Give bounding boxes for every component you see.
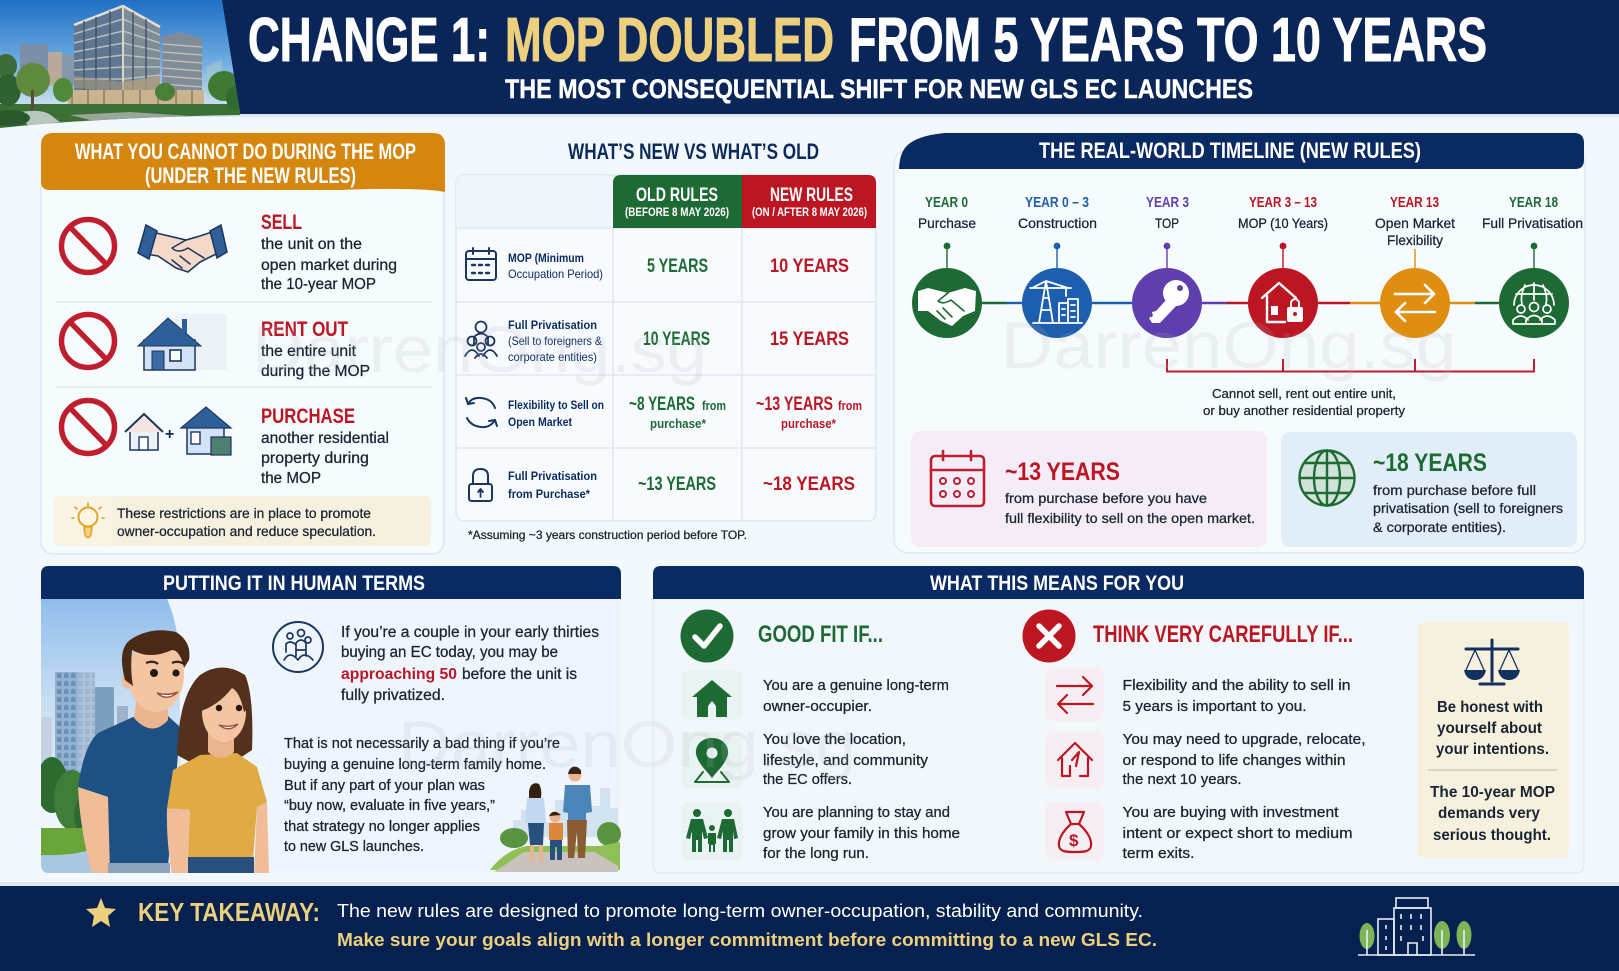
column header: old rules: (BEFORE 8 MAY 2026) xyxy=(625,205,729,219)
row: full privatisation: (Sell to foreigners & xyxy=(508,334,602,348)
step: year 18 privatisation xyxy=(1482,194,1583,338)
main title xyxy=(248,6,1487,75)
row: flexibility to sell xyxy=(466,394,862,431)
item: location: the EC offers. xyxy=(763,772,852,788)
step: year 3-13 MOP: YEAR 3 – 13 xyxy=(1249,194,1317,211)
text block: couple in thirties: buying an EC today, you may be xyxy=(341,644,558,661)
watermarks: DarrenOng.sg xyxy=(1001,308,1456,382)
item: upgrade or relocate: or respond to life changes within xyxy=(1122,753,1346,769)
row: privatisation from purchase: Full Privatisation xyxy=(508,469,597,483)
item: family xyxy=(681,802,960,862)
row: flexibility to sell: Flexibility to Sell on xyxy=(508,398,604,412)
item: flexibility: Flexibility and the ability to sell in xyxy=(1122,678,1350,694)
item: location xyxy=(681,732,929,788)
row: MOP: 10 YEARS xyxy=(770,256,849,277)
column: think very carefully: THINK VERY CAREFULLY IF... xyxy=(1093,621,1353,648)
step: year 3 TOP xyxy=(1132,194,1202,338)
item: upgrade or relocate: You may need to upgrade, relocate, xyxy=(1122,732,1366,748)
heading: what this means: WHAT THIS MEANS FOR YOU xyxy=(930,572,1184,595)
heading: new vs old: WHAT’S NEW VS WHAT’S OLD xyxy=(568,139,819,164)
footer: key takeaway: The new rules are designed to promote long-term owner-occupation, stability and community. xyxy=(337,901,1143,921)
row: flexibility to sell: purchase* xyxy=(650,416,707,431)
icon: padlock xyxy=(469,469,492,501)
row: MOP xyxy=(466,248,849,281)
subtitle: THE MOST CONSEQUENTIAL SHIFT FOR NEW GLS EC LAUNCHES xyxy=(505,74,1253,104)
callout: be honest: serious thought. xyxy=(1433,827,1551,844)
column header: old rules: OLD RULES xyxy=(636,185,718,206)
icon: two houses xyxy=(125,407,231,455)
main title: CHANGE 1: xyxy=(248,6,490,75)
step: year 3-13 MOP xyxy=(1238,194,1328,338)
item: owner-occupier: owner-occupier. xyxy=(763,699,872,715)
heading: cannot do: (UNDER THE NEW RULES) xyxy=(145,163,356,188)
bracket caption: or buy another residential property xyxy=(1203,403,1405,418)
row: privatisation from purchase: ~13 YEARS xyxy=(638,474,716,495)
text block: long-term family home: “buy now, evaluate in five years,” xyxy=(284,798,495,814)
item: owner-occupier: You are a genuine long-term xyxy=(763,678,949,694)
icon: scales xyxy=(1464,640,1520,684)
row: sell: open market during xyxy=(261,257,397,274)
card: 13 years: from purchase before you have xyxy=(1005,490,1207,506)
step: year 3 TOP: TOP xyxy=(1155,215,1179,231)
heading: cannot do xyxy=(41,133,445,192)
panel: putting it in human terms xyxy=(36,566,621,875)
icon: globe xyxy=(1300,450,1355,506)
watermarks xyxy=(252,308,1456,781)
row: rent out: the entire unit xyxy=(261,343,357,360)
bracket caption xyxy=(1203,386,1405,418)
step: year 0 purchase: YEAR 0 xyxy=(925,194,968,211)
row: full privatisation: 10 YEARS xyxy=(643,329,710,350)
panel: what this means for you xyxy=(653,566,1584,873)
icon: star xyxy=(86,898,116,927)
item: upgrade or relocate xyxy=(1045,732,1366,788)
item: family: You are planning to stay and xyxy=(763,805,950,821)
step: year 3-13 MOP: MOP (10 Years) xyxy=(1238,215,1328,231)
item: location: lifestyle, and community xyxy=(763,753,929,769)
text block: long-term family home: buying a genuine long-term family home. xyxy=(284,757,546,773)
row: full privatisation: corporate entities) xyxy=(508,350,597,364)
heading: timeline: THE REAL-WORLD TIMELINE (NEW RULES) xyxy=(1039,138,1421,163)
step: year 18 privatisation: YEAR 18 xyxy=(1509,194,1558,211)
main title: MOP DOUBLED xyxy=(505,6,834,75)
comparison table xyxy=(456,175,876,521)
step: year 0 purchase: Purchase xyxy=(918,215,976,231)
callout: restrictions note: These restrictions are in place to promote xyxy=(117,505,371,521)
row: MOP: 5 YEARS xyxy=(647,256,708,277)
row: flexibility to sell: from xyxy=(702,398,726,413)
callout: be honest: Be honest with xyxy=(1437,699,1543,716)
row: purchase: PURCHASE xyxy=(261,405,355,428)
row: flexibility to sell: ~13 YEARS xyxy=(756,394,833,415)
icon: light bulb xyxy=(72,503,104,538)
step: year 13 flexibility: Open Market xyxy=(1375,215,1455,231)
heading: timeline xyxy=(899,133,1584,169)
icon: people xyxy=(465,322,497,358)
text block: couple in thirties: approaching 50 xyxy=(341,666,457,683)
footer: key takeaway: Make sure your goals align with a longer commitment before committing to a new GLS EC. xyxy=(337,930,1157,950)
item: investment intent: $ xyxy=(1069,831,1079,850)
row: full privatisation xyxy=(465,318,849,364)
bracket caption: Cannot sell, rent out entire unit, xyxy=(1212,386,1396,401)
card: 18 years xyxy=(1281,432,1577,547)
icon: cycle arrows xyxy=(466,398,497,427)
row: flexibility to sell: from xyxy=(838,398,862,413)
text block: long-term family home xyxy=(284,736,560,855)
icon: white handshake xyxy=(918,288,976,326)
icon: handshake xyxy=(138,225,227,272)
item: investment intent: term exits. xyxy=(1122,846,1194,862)
figure: woman xyxy=(167,668,269,875)
column: good fit xyxy=(680,610,960,862)
icon: opposite arrows xyxy=(1395,285,1435,321)
row: flexibility to sell: ~8 YEARS xyxy=(629,394,695,415)
text block: long-term family home: But if any part of your plan was xyxy=(284,778,485,794)
item: investment intent xyxy=(1045,802,1352,862)
heading: human terms: PUTTING IT IN HUMAN TERMS xyxy=(163,572,425,595)
row: sell xyxy=(62,211,397,293)
icon: building and trees xyxy=(1358,898,1475,955)
icon: check badge xyxy=(680,610,734,662)
callout: be honest: yourself about xyxy=(1437,720,1542,737)
icon: red calendar xyxy=(931,451,984,506)
item: owner-occupier xyxy=(681,670,949,720)
item: flexibility: 5 years is important to you. xyxy=(1122,699,1306,715)
column header: new rules: NEW RULES xyxy=(770,185,853,206)
table footnote: *Assuming ~3 years construction period before TOP. xyxy=(468,528,747,542)
row: privatisation from purchase xyxy=(469,469,855,501)
row: sell: the 10-year MOP xyxy=(261,276,376,293)
timeline connector xyxy=(982,302,1499,304)
card: 18 years: ~18 YEARS xyxy=(1373,449,1487,477)
heading: what this means xyxy=(653,566,1584,599)
row: rent out xyxy=(62,314,370,380)
step: year 13 flexibility: Flexibility xyxy=(1387,232,1443,248)
step: year 0 purchase xyxy=(912,194,982,338)
row: full privatisation: Full Privatisation xyxy=(508,318,597,332)
footer: key takeaway xyxy=(0,882,1619,971)
text block: couple in thirties: fully privatized. xyxy=(341,687,445,704)
text block: long-term family home: That is not necessarily a bad thing if you’re xyxy=(284,736,560,752)
column header: new rules: (ON / AFTER 8 MAY 2026) xyxy=(752,205,867,219)
text block: long-term family home: that strategy no longer applies xyxy=(284,819,480,835)
callout: restrictions note xyxy=(54,496,431,546)
step: year 13 flexibility: YEAR 13 xyxy=(1390,194,1439,211)
card: 18 years: privatisation (sell to foreigners xyxy=(1373,500,1563,516)
row: flexibility to sell: Open Market xyxy=(508,415,572,429)
watermarks: DarrenOng.sg xyxy=(252,312,707,386)
icon: crane and buildings xyxy=(1030,281,1082,323)
text block: couple in thirties: If you’re a couple in your early thirties xyxy=(341,624,599,641)
item: location: You love the location, xyxy=(763,732,906,748)
icon: globe and people xyxy=(1513,283,1555,324)
header banner xyxy=(0,0,1619,130)
icon: family in circle xyxy=(273,622,323,672)
heading: human terms xyxy=(41,566,621,599)
row: MOP: MOP (Minimum xyxy=(508,251,584,265)
illustration: family walking xyxy=(490,767,621,872)
card: 18 years: from purchase before full xyxy=(1373,482,1536,498)
illustration: couple with city backdrop xyxy=(36,599,621,875)
step: year 0-3 construction: Construction xyxy=(1018,215,1097,231)
row: MOP: Occupation Period) xyxy=(508,267,603,281)
row: rent out: during the MOP xyxy=(261,363,370,380)
panel: real-world timeline xyxy=(894,133,1585,553)
step: year 13 flexibility xyxy=(1375,194,1455,338)
callout: restrictions note: owner-occupation and reduce speculation. xyxy=(117,523,376,539)
card: 13 years: full flexibility to sell on the open market. xyxy=(1005,510,1255,526)
row: purchase: the MOP xyxy=(261,470,321,487)
card: 13 years xyxy=(911,431,1267,547)
icon: calendar xyxy=(466,248,496,280)
text block: long-term family home: to new GLS launches. xyxy=(284,839,424,855)
card: 18 years: & corporate entities). xyxy=(1373,519,1506,535)
footer: key takeaway: KEY TAKEAWAY: xyxy=(138,897,320,927)
item: family: for the long run. xyxy=(763,846,869,862)
item: investment intent: You are buying with investment xyxy=(1122,805,1338,821)
heading: cannot do: WHAT YOU CANNOT DO DURING THE MOP xyxy=(75,139,416,164)
callout: be honest: The 10-year MOP xyxy=(1430,784,1555,801)
step: year 0-3 construction: YEAR 0 – 3 xyxy=(1025,194,1089,211)
item: investment intent: intent or expect short to medium xyxy=(1122,826,1352,842)
text block: couple in thirties: before the unit is xyxy=(462,666,577,683)
row: purchase: property during xyxy=(261,450,369,467)
row: flexibility to sell: purchase* xyxy=(781,416,837,431)
step: year 3 TOP: YEAR 3 xyxy=(1146,194,1189,211)
step: year 18 privatisation: Full Privatisation xyxy=(1482,215,1583,231)
icon: house xyxy=(138,314,227,370)
icon: cross badge xyxy=(1022,610,1076,662)
header illustration: condo building xyxy=(0,0,246,130)
row: privatisation from purchase: from Purchase* xyxy=(508,487,590,501)
step: year 0-3 construction xyxy=(1018,194,1097,338)
icon: key xyxy=(1149,280,1189,323)
row: rent out: RENT OUT xyxy=(261,318,348,341)
figure: man xyxy=(78,630,189,875)
icon: two houses: + xyxy=(165,426,174,443)
row: purchase xyxy=(62,400,389,487)
column header: old rules xyxy=(613,175,742,228)
text block: couple in thirties xyxy=(341,624,599,704)
watermarks: DarrenOng.sg xyxy=(398,707,856,781)
row: sell: the unit on the xyxy=(261,236,362,253)
row: privatisation from purchase: ~18 YEARS xyxy=(763,474,855,495)
row: purchase: another residential xyxy=(261,430,389,447)
card: 13 years: ~13 YEARS xyxy=(1005,458,1120,486)
panel: what you cannot do xyxy=(41,133,445,554)
column: think very carefully xyxy=(1022,610,1366,862)
column header: new rules xyxy=(742,175,876,228)
row: sell: SELL xyxy=(261,211,302,234)
restriction bracket xyxy=(1167,359,1534,372)
item: upgrade or relocate: the next 10 years. xyxy=(1122,772,1242,788)
callout: be honest xyxy=(1417,622,1569,858)
item: family: grow your family in this home xyxy=(763,826,960,842)
column: good fit: GOOD FIT IF... xyxy=(758,621,883,648)
callout: be honest: demands very xyxy=(1438,805,1540,822)
row: full privatisation: 15 YEARS xyxy=(770,329,849,350)
icon: house with lock xyxy=(1262,283,1303,322)
callout: be honest: your intentions. xyxy=(1436,741,1549,758)
item: flexibility xyxy=(1045,668,1350,721)
